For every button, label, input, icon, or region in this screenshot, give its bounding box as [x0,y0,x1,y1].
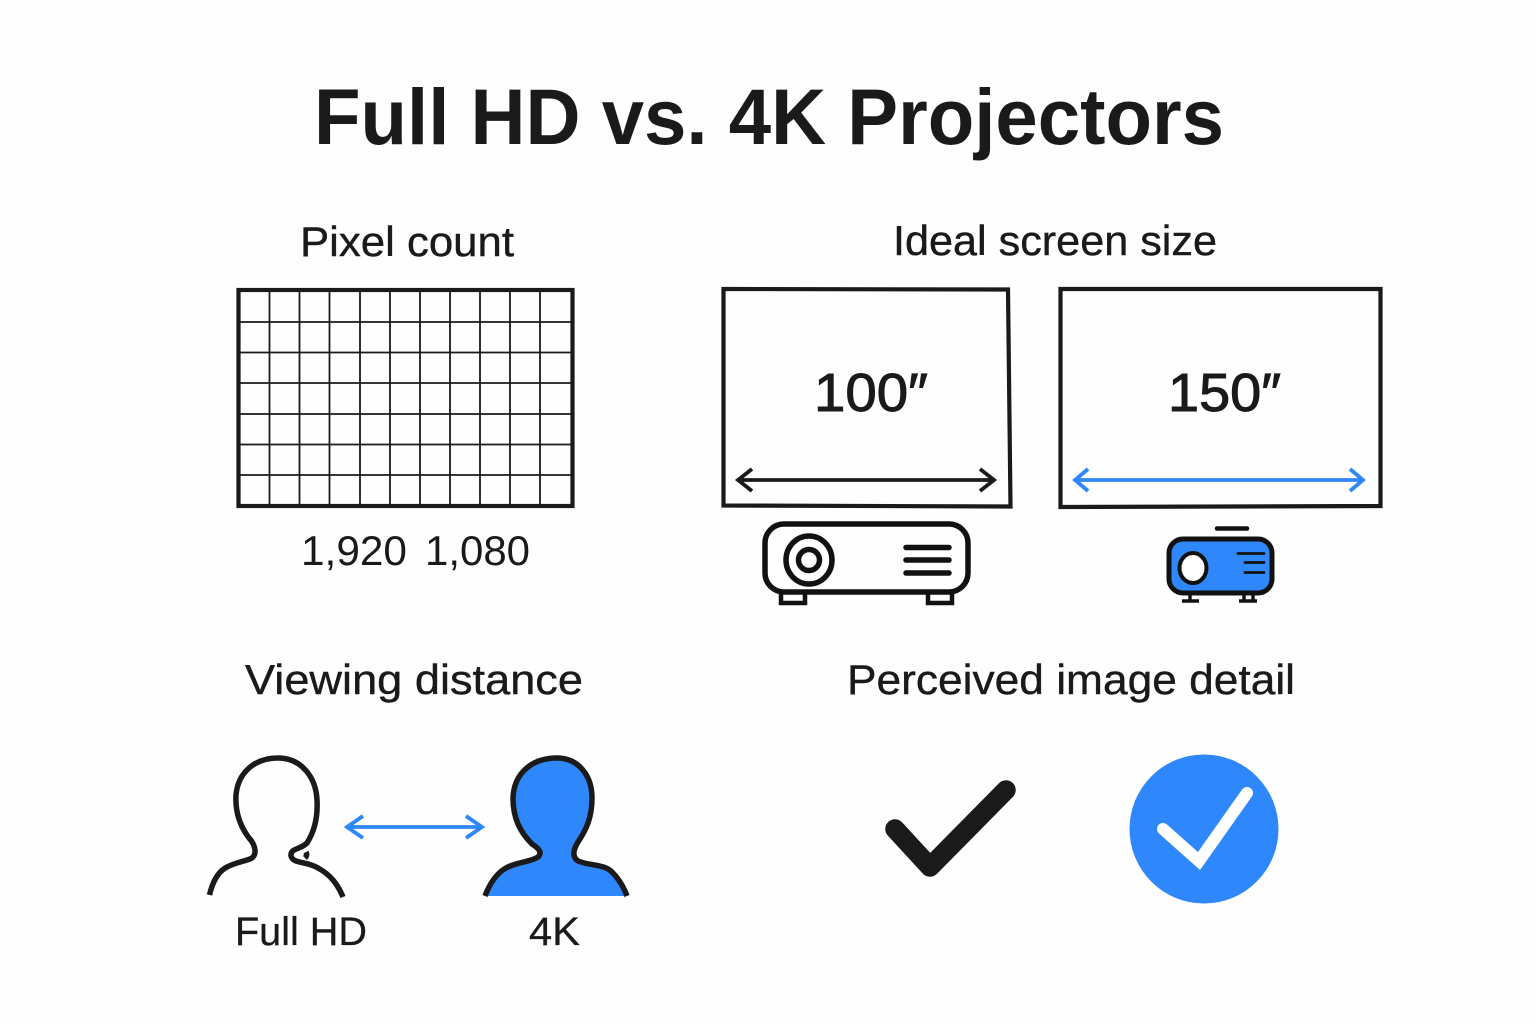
icon: blue check circle [1130,754,1278,904]
heading: perceived image detail: Perceived image detail [847,656,1295,703]
label: 4K: 4K [529,910,580,954]
icon: blue projector [1169,528,1272,601]
panel: pixel count [238,218,572,574]
screen: 100 inch [724,289,1010,506]
pixel count values: 1,080 [425,527,530,574]
pixel grid [238,290,572,506]
panel: viewing distance [210,656,627,954]
screen: 150 inch: 150″ [1168,363,1281,423]
heading: pixel count: Pixel count [300,218,514,265]
panel: ideal screen size [724,217,1380,603]
heading: ideal screen size: Ideal screen size [893,217,1217,264]
title: Full HD vs. 4K Projectors [314,72,1224,161]
icon: outline person [210,758,343,897]
icon: blue person [485,758,627,896]
icon: white projector [765,524,968,603]
pixel count values [301,527,530,574]
icon: black check [895,790,1006,867]
screen: 150 inch [1060,289,1380,507]
heading: viewing distance: Viewing distance [245,656,583,703]
outline of blue person [485,758,627,896]
pixel count values: 1,920 [301,527,407,574]
label: Full HD: Full HD [235,910,367,954]
double arrow: distance [347,816,482,838]
screen: 100 inch: 100″ [814,363,928,423]
panel: perceived image detail [847,656,1295,904]
